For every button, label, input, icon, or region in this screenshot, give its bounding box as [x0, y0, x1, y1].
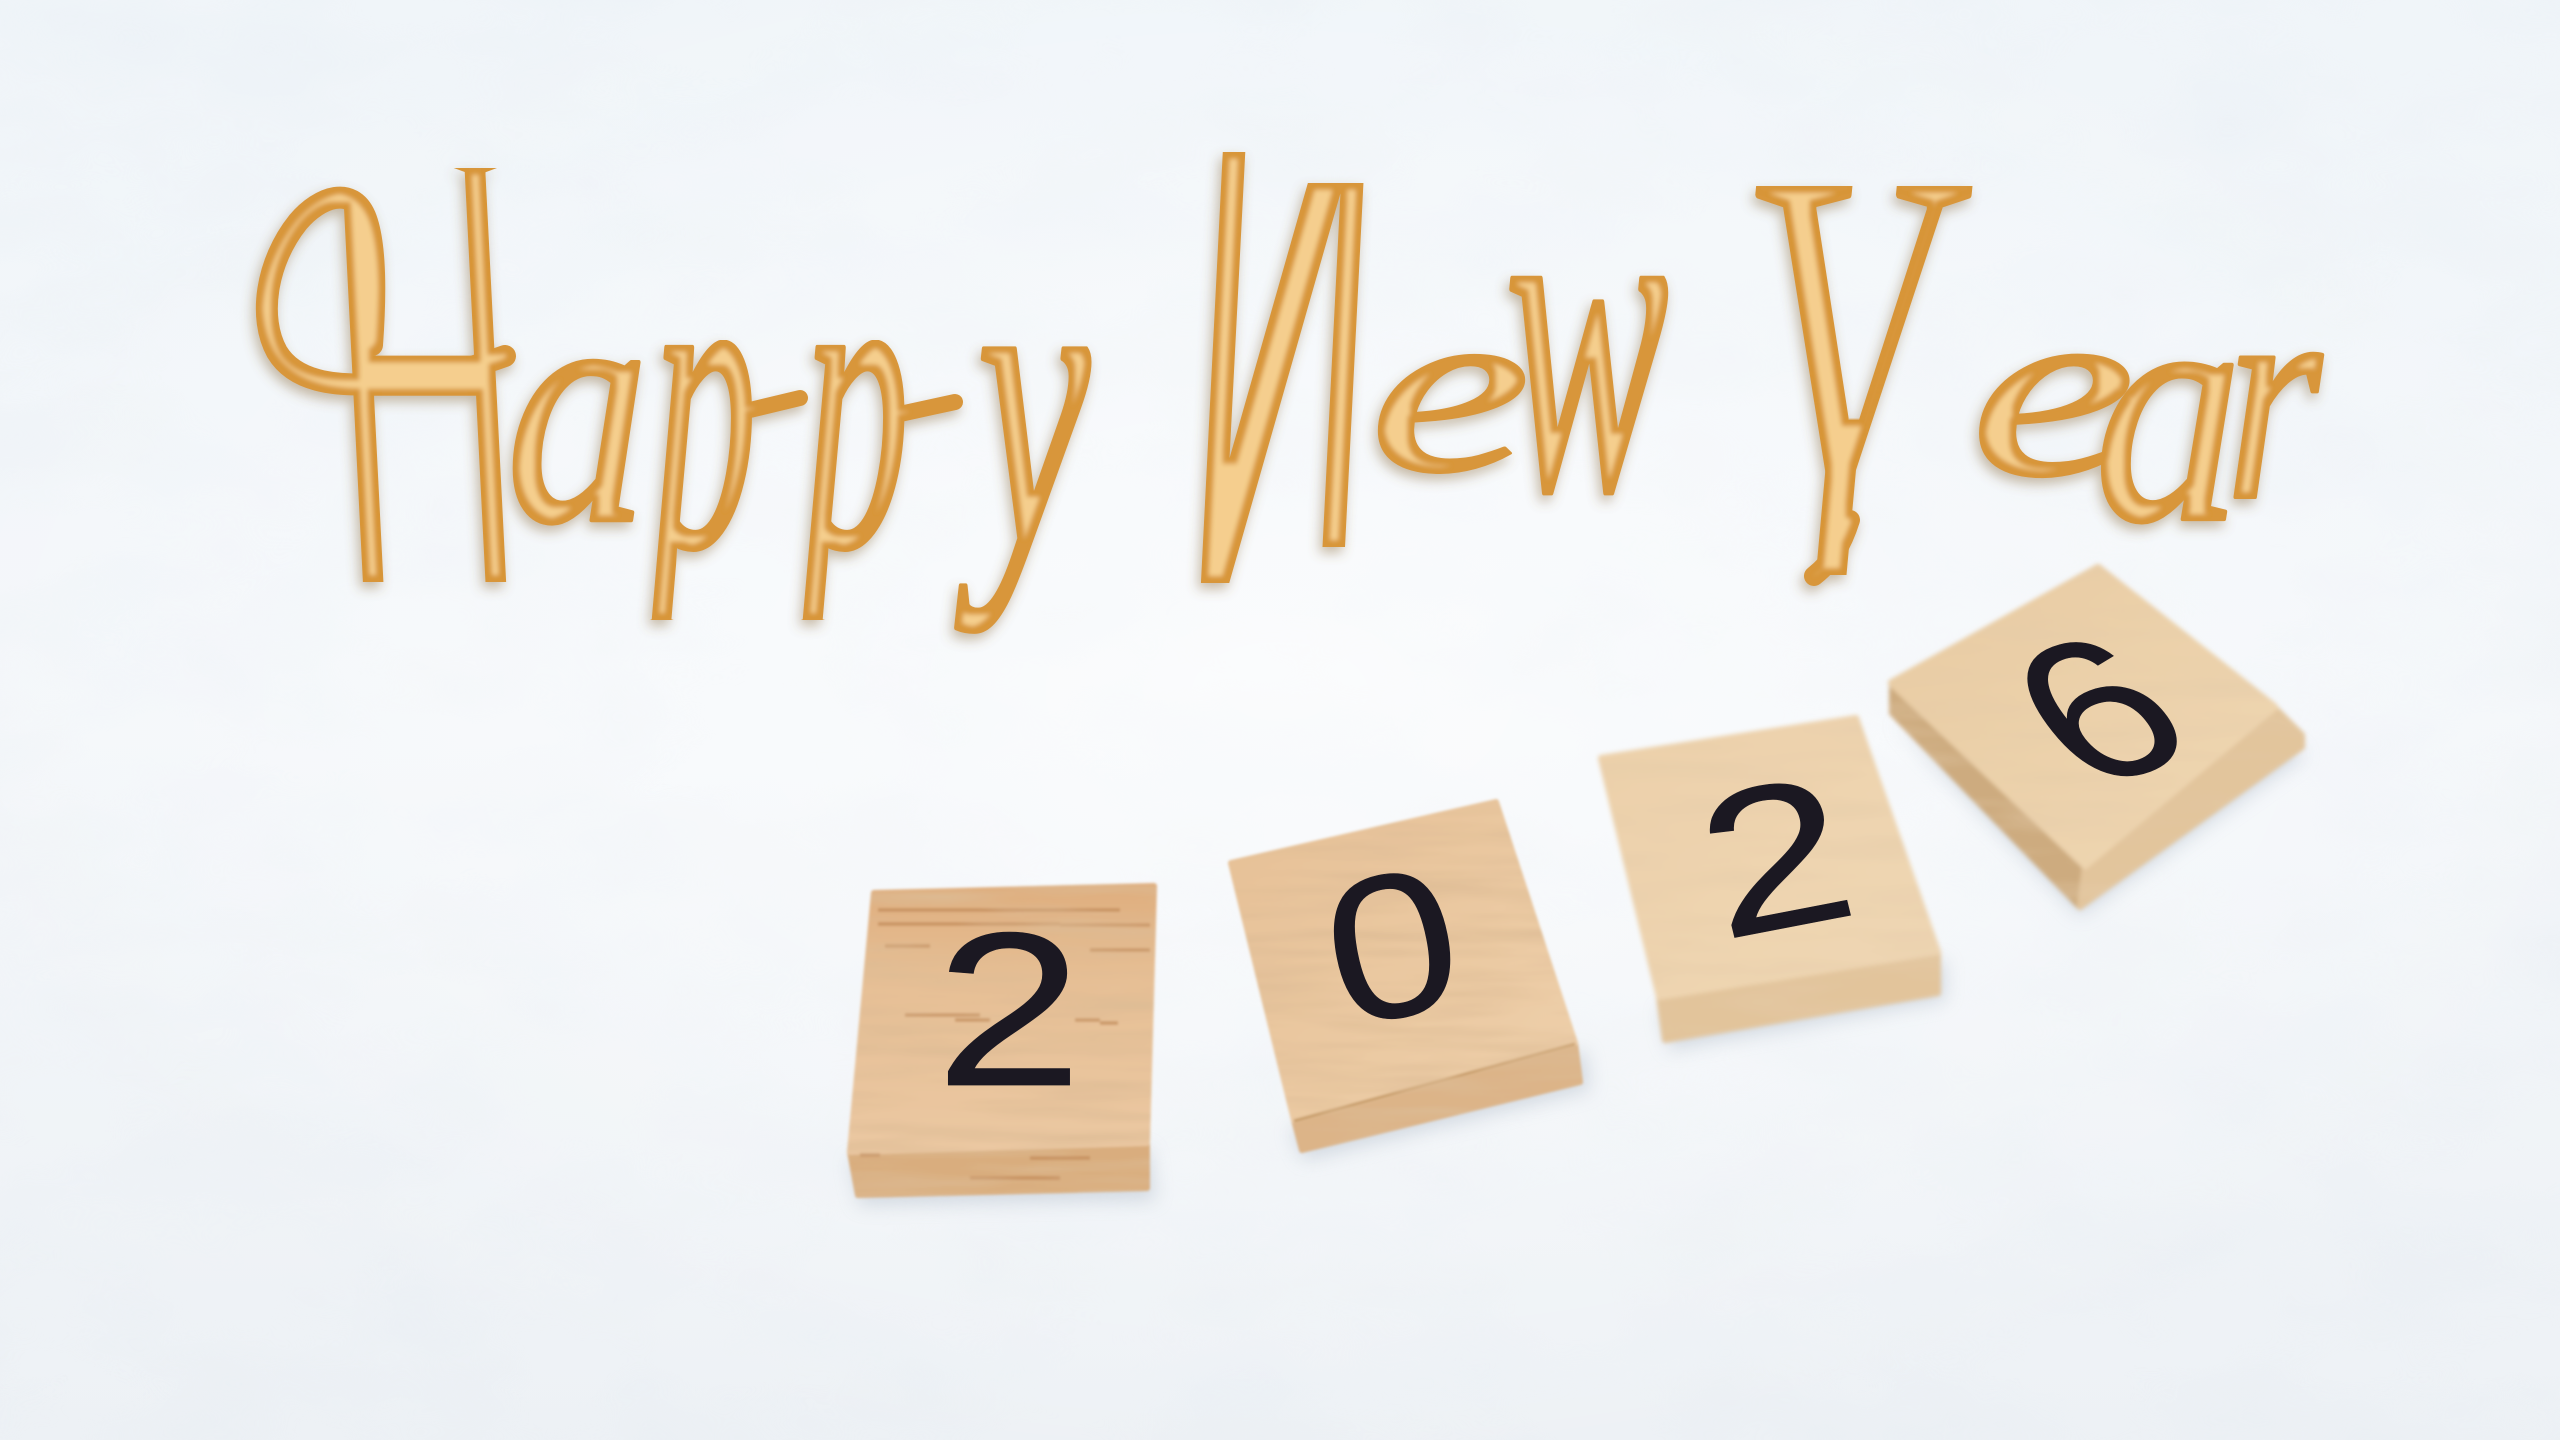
word: New — [1190, 150, 1674, 598]
digit 2: 2 — [1678, 732, 1874, 984]
decorative connector — [750, 398, 800, 410]
digit 2: 2 — [935, 888, 1083, 1133]
word: Year: r — [2225, 226, 2325, 564]
word: Happy: y — [954, 169, 1091, 633]
word: Happy: p — [790, 162, 910, 640]
digit 6: 6 — [1962, 591, 2236, 832]
word: Year: e — [1970, 250, 2136, 529]
decorative swash on H — [267, 198, 505, 384]
word: Happy: p — [639, 162, 757, 640]
word: Happy — [244, 166, 1096, 648]
decorative connector — [900, 402, 955, 414]
tile: digit 0 — [1231, 802, 1580, 1150]
digit 0: 0 — [1306, 821, 1479, 1073]
word: New: e — [1369, 254, 1531, 523]
decorative tail on Y — [1814, 520, 1850, 576]
title: Happy New Year in gold script — [244, 150, 2328, 648]
tile: digit 6 — [1892, 568, 2302, 907]
tile shadows — [850, 720, 2305, 1205]
word: Year: Y — [1731, 1, 1978, 823]
tile: digit 2 — [850, 886, 1154, 1195]
word: Year: a — [2094, 225, 2243, 592]
word: Happy: a — [506, 219, 649, 594]
word: Year — [1745, 184, 2328, 599]
word: New: w — [1505, 82, 1668, 588]
tile: digit 2 (second) — [1601, 718, 1938, 1040]
